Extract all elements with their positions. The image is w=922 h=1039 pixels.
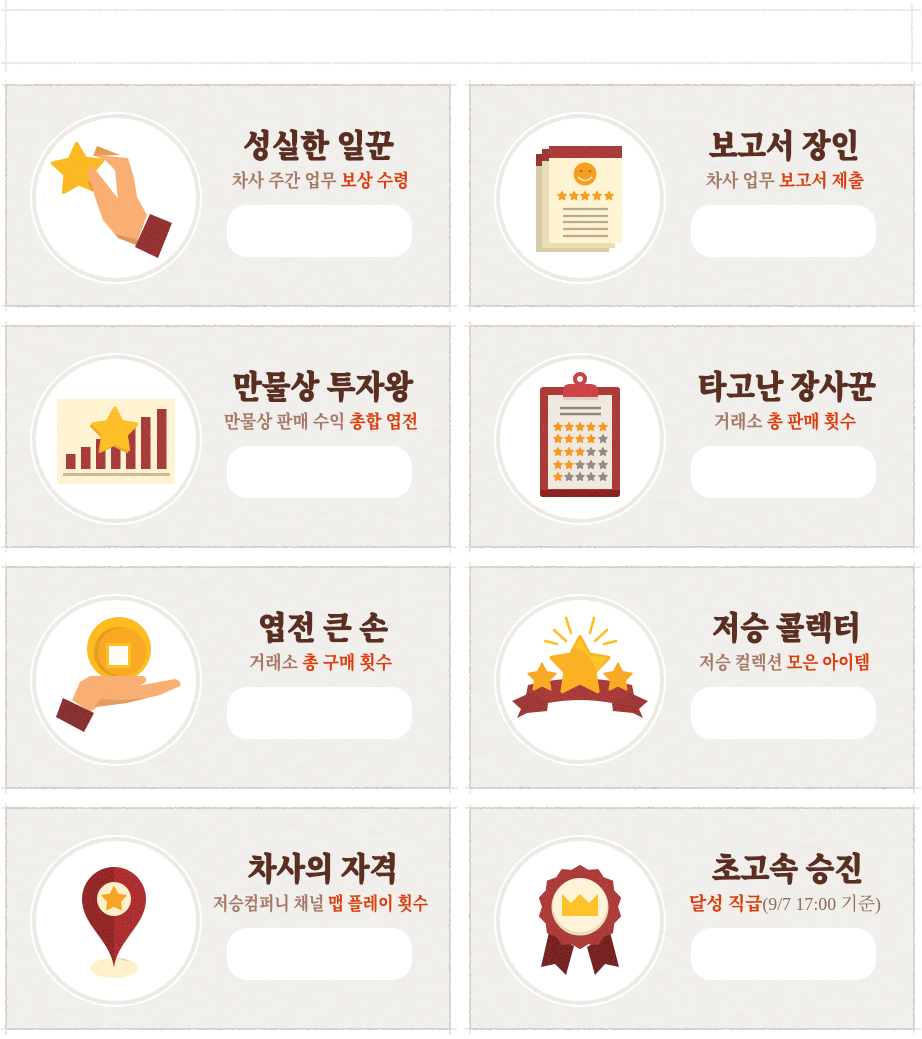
text: 보고서 장인: 차사 업무 보고서 제출 — [706, 170, 865, 191]
text: 보고서 장인: 보고서 장인 — [709, 128, 859, 164]
text: 저승 콜렉터: 저승 콜렉터 — [712, 610, 861, 646]
text: 저승 콜렉터: 저승 컬렉션 모은 아이템 — [699, 652, 870, 673]
text: 만물상 투자왕: 만물상 투자왕 — [233, 369, 413, 405]
text: 타고난 장사꾼: 거래소 총 판매 횟수 — [714, 411, 857, 432]
text: 만물상 투자왕: 만물상 판매 수익 총합 엽전 — [224, 411, 418, 432]
text: 타고난 장사꾼: 타고난 장사꾼 — [698, 369, 876, 405]
value pills — [227, 205, 876, 980]
icon: hand holding star — [51, 142, 172, 258]
text: 엽전 큰 손: 거래소 총 구매 횟수 — [249, 652, 393, 673]
text: 차사의 자격: 차사의 자격 — [248, 851, 398, 887]
text: 초고속 승진: 초고속 승진 — [712, 851, 863, 887]
text: 성실한 일꾼: 차사 주간 업무 보상 수령 — [232, 170, 409, 191]
text: 엽전 큰 손: 엽전 큰 손 — [258, 610, 388, 646]
text: 저승 콜렉터 — [699, 610, 870, 673]
text: 성실한 일꾼 — [232, 128, 409, 191]
icon: rosette medal — [540, 866, 620, 975]
text: 차사의 자격: 저승컴퍼니 채널 맵 플레이 횟수 — [213, 893, 429, 914]
text: 만물상 투자왕 — [224, 369, 418, 432]
text: 보고서 장인 — [706, 128, 865, 191]
text: 타고난 장사꾼 — [698, 369, 876, 432]
icon: clipboard with star ratings — [540, 372, 620, 497]
icon: report pages — [536, 146, 622, 252]
text: 초고속 승진: 달성 직급(9/7 17:00 기준) — [689, 893, 881, 915]
icon: map pin — [82, 867, 146, 978]
icon: bar chart with star — [57, 399, 175, 484]
header frame — [1, 0, 921, 72]
icon: hand holding coin — [56, 617, 180, 732]
icon: stars with ribbon — [512, 618, 648, 718]
badge circles — [30, 112, 666, 1007]
text: 초고속 승진 — [689, 851, 881, 915]
text: 차사의 자격 — [213, 851, 429, 914]
text: 엽전 큰 손 — [249, 610, 393, 673]
text: 성실한 일꾼: 성실한 일꾼 — [243, 128, 394, 164]
